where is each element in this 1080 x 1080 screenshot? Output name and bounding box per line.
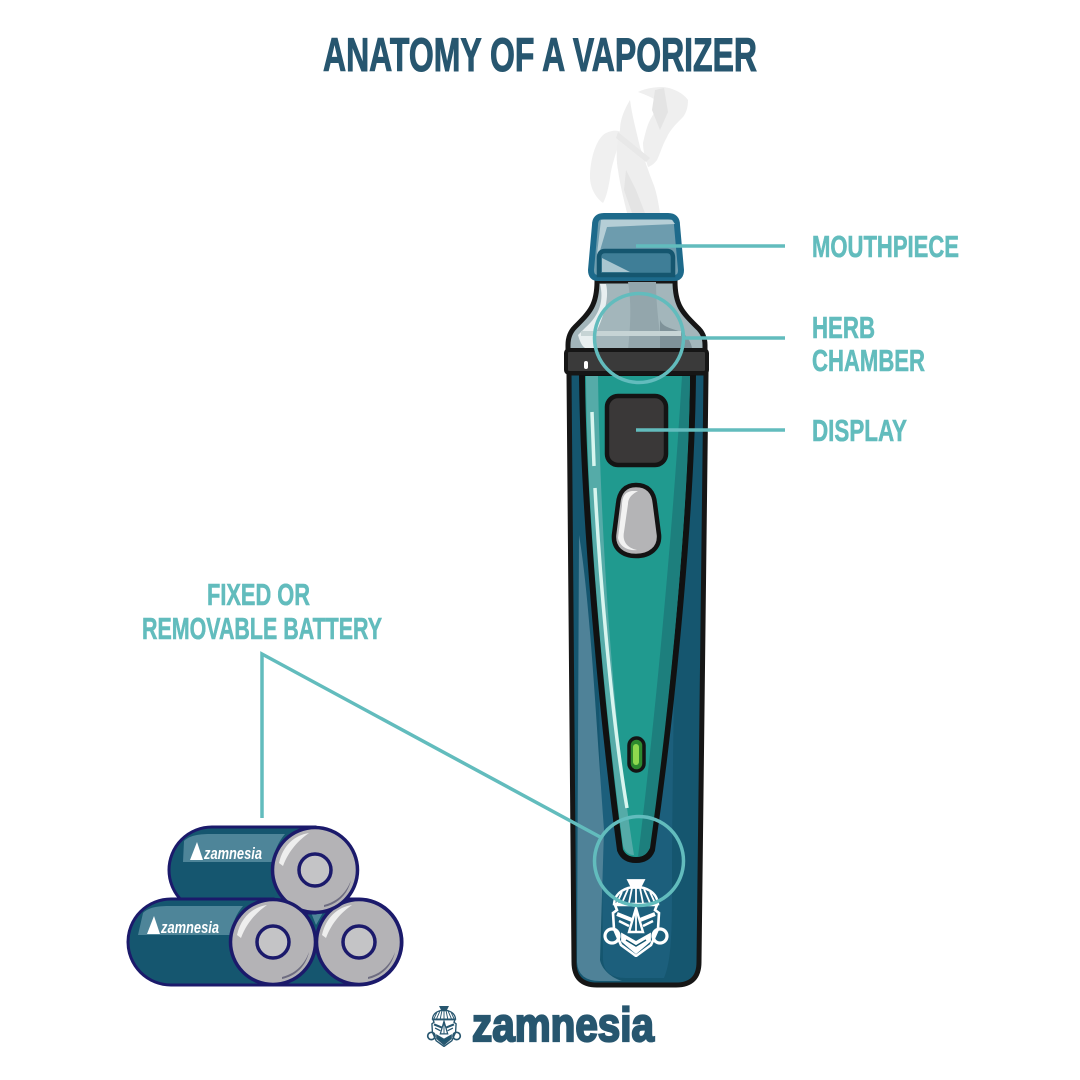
battery label: zamnesia [160,918,219,937]
mask logo on device [605,880,667,956]
battery: bottom left [128,899,316,985]
mouthpiece inner ring [599,251,673,275]
label line: battery with circle [262,654,684,906]
label: display: DISPLAY [812,413,907,448]
display [607,396,666,465]
battery: top [169,827,358,913]
logo wordmark: zamnesia [472,998,655,1051]
panel left light strip [586,376,634,855]
LED indicator [629,738,644,771]
label: fixed or removable battery: FIXED OR [207,577,310,612]
label: herb chamber: HERB [812,310,875,345]
teal front panel [582,373,693,860]
black collar [566,350,707,373]
battery label [147,916,219,937]
batteries [128,827,402,985]
label line: display [636,428,785,432]
device body [569,373,706,985]
panel right dark strip [638,376,690,857]
battery label: zamnesia [203,844,262,863]
battery label [190,842,262,863]
battery: bottom right [250,899,402,985]
logo mask icon [428,1007,460,1046]
label: fixed or removable battery: REMOVABLE BATTERY [142,611,382,646]
highlight lines [592,412,627,808]
icon: vapor smoke [590,87,688,213]
body shading [596,600,675,978]
label: mouthpiece: MOUTHPIECE [812,229,959,264]
label: herb chamber: CHAMBER [812,343,925,378]
label line: mouthpiece [636,244,785,248]
mouthpiece [591,216,681,278]
label: herb chamber [812,310,925,378]
label: fixed or removable battery [142,577,382,646]
glass chamber [568,281,705,351]
chamber shading [628,282,660,350]
vaporizer device [566,216,707,985]
button [614,485,659,556]
label line: herb chamber with circle [594,294,785,382]
footer logo [428,998,655,1051]
title: ANATOMY OF A VAPORIZER [323,28,757,81]
